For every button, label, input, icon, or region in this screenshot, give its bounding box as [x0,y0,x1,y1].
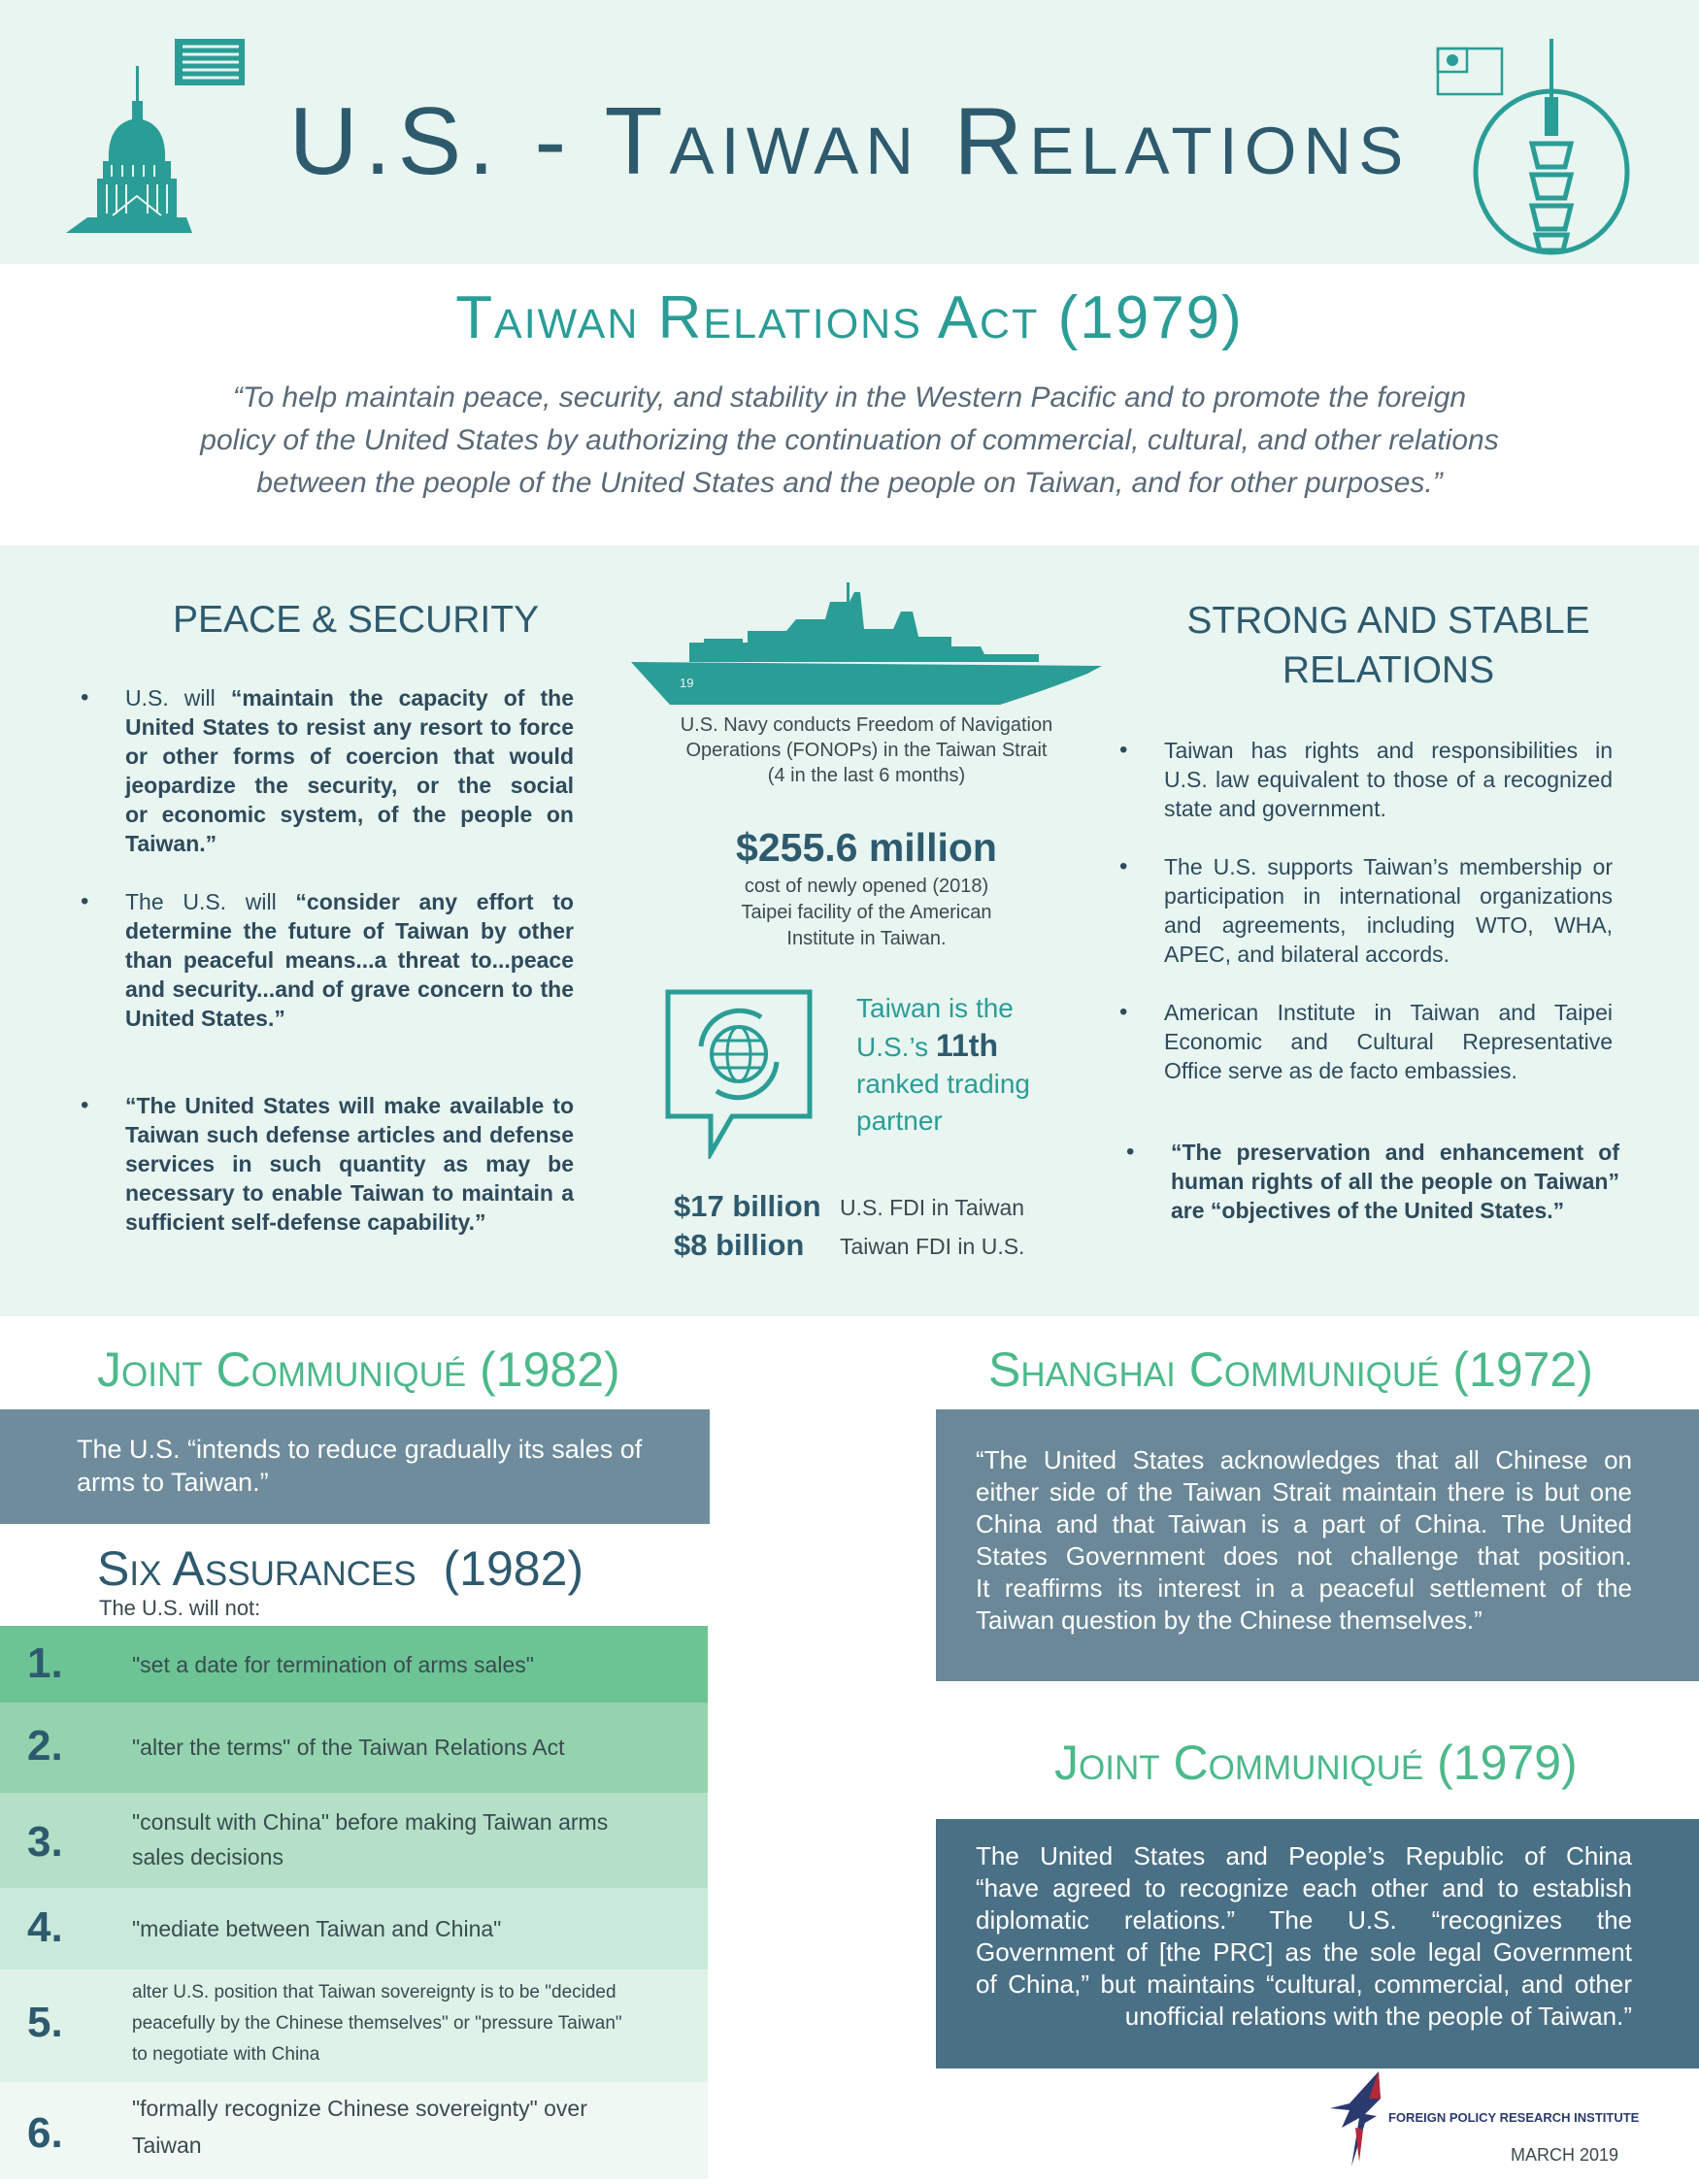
caption: AIT facility [742,876,991,949]
item 1 [0,1626,708,1703]
item 2: "alter the terms" of the Taiwan Relations Act [132,1735,564,1760]
item 1: 1. [27,1639,63,1687]
logo: FPRI: FOREIGN POLICY RESEARCH INSTITUTE [1388,2110,1639,2125]
icon: navy ship [631,582,1102,705]
bullet 2: and security...and of grave concern to the [125,976,574,1002]
item 2: 2. [27,1722,63,1770]
bullet r2: The U.S. supports Taiwan’s membership or [1164,854,1613,879]
bullet r3: Economic and Cultural Representative [1164,1029,1613,1054]
bullet r1 [1164,736,1613,823]
heading: Joint Communique 1982: Joint Communiqué (1982) [97,1342,620,1397]
box: 1979 communique: “have agreed to recognize each other and to establish [976,1873,1632,1903]
stat: FDI [674,1189,1024,1262]
item 2 [0,1703,708,1793]
bullet r3: Office serve as de facto embassies. [1164,1058,1517,1083]
caption: AIT facility: cost of newly opened (2018) [745,876,988,897]
caption: FONOPs: (4 in the last 6 months) [768,765,965,786]
text: 11th ranked trading partner: Taiwan is the U.S.’s 11th ranked trading partner [856,993,1030,1136]
text: the US will not: The U.S. will not: [99,1596,260,1620]
heading: Joint Communique 1979: Joint Communiqué (1979) [1054,1736,1578,1790]
item 6: 6. [27,2109,63,2157]
caption: FONOPs: Operations (FONOPs) in the Taiwan Strait [685,740,1047,761]
list: six assurances [0,1626,708,2179]
bullet r3 [1164,998,1613,1085]
item 5: 5. [27,1999,63,2046]
box: Shanghai communique: States Government does not challenge that position. [976,1541,1632,1571]
box: Shanghai communique: “The United States acknowledges that all Chinese on [976,1445,1632,1474]
bullet 2: United States.” [125,1006,285,1031]
bullet 3: sufficient self-defense capability.” [125,1209,486,1235]
item 3: sales decisions [132,1844,283,1870]
bullet 2: than peaceful means...a threat to...peace [125,947,574,973]
heading: strong and stable relations: STRONG AND STABLE RELATIONS [1186,600,1590,691]
box: Shanghai communique [936,1409,1699,1681]
bullet 1 [125,683,574,858]
bullet 1: Taiwan.” [125,831,217,856]
item 3: 3. [27,1818,63,1866]
quote: TRA purpose [200,381,1499,499]
bullet r2: APEC, and bilateral accords. [1164,942,1449,967]
item 6: Taiwan [132,2133,202,2158]
bullet r4: are “objectives of the United States.” [1171,1198,1564,1223]
bullet 3 [125,1091,574,1237]
item 6: "formally recognize Chinese sovereignty" over [132,2096,587,2121]
bullet r4: human rights of all the people on Taiwan” [1171,1169,1619,1194]
bullet r1: Taiwan has rights and responsibilities in [1164,738,1613,763]
item 5: peacefully by the Chinese themselves" or "pressure Taiwan" [132,2013,622,2034]
box: Shanghai communique: Taiwan question by the Chinese themselves.” [976,1605,1482,1635]
stat: $255.6 million: $255.6 million [736,825,997,870]
heading: Taiwan Relations Act: Taiwan Relations Act (1979) [455,284,1244,351]
stat: FDI: U.S. FDI in Taiwan [840,1195,1024,1220]
box: 1982 communique [0,1409,710,1524]
bullet 1: jeopardize the security, or the social [125,773,574,798]
logo: FPRI [1330,2071,1639,2167]
icon: globe speech bubble [666,990,812,1159]
item 3: "consult with China" before making Taiwan arms [132,1809,608,1835]
box: 1979 communique: unofficial relations with the people of Taiwan.” [1125,2002,1632,2031]
bullet r1: U.S. law equivalent to those of a recognized [1164,767,1613,792]
heading: six assurances: Six Assurances (1982) [97,1541,583,1596]
bullet 3: services in such quantity as may be [125,1151,574,1176]
item 4: "mediate between Taiwan and China" [132,1916,501,1941]
heading: Shanghai Communique: Shanghai Communiqué (1972) [988,1342,1593,1397]
caption: FONOPs [681,714,1052,786]
caption: AIT facility: Institute in Taiwan. [786,928,947,949]
bullet 2: determine the future of Taiwan by other [125,918,574,943]
logo: FPRI: MARCH 2019 [1511,2145,1618,2165]
bullet r1: state and government. [1164,796,1386,821]
bullet r2: participation in international organizations [1164,883,1613,909]
bullet r2: and agreements, including WTO, WHA, [1164,912,1613,938]
box: 1979 communique: Government of [the PRC] as the sole legal Government [976,1937,1632,1967]
item 4 [0,1888,708,1969]
bullet 1: U.S. will “maintain the capacity of the [125,685,574,711]
box: 1979 communique: diplomatic relations.” The U.S. “recognizes the [976,1905,1632,1935]
item 1: "set a date for termination of arms sales" [132,1652,534,1677]
box: Shanghai communique: It reaffirms its interest in a peaceful settlement of the [976,1573,1632,1603]
bullet 2: The U.S. will “consider any effort to [125,889,574,914]
icon: navy ship: 19 [680,676,693,690]
item 4: 4. [27,1903,63,1951]
title: U.S. - Taiwan Relations [289,87,1410,194]
quote: TRA purpose: between the people of the United States and the people on Taiwan, and for other purposes.” [256,467,1443,499]
bullet 3: Taiwan such defense articles and defense [125,1122,574,1147]
bullet r4: “The preservation and enhancement of [1171,1140,1619,1165]
bullet 1: or other forms of coercion that would [125,744,574,769]
bullet 3: necessary to enable Taiwan to maintain a [125,1180,574,1206]
bullet 3: “The United States will make available to [125,1093,574,1118]
header band [0,0,1699,264]
item 5 [0,1969,708,2082]
caption: FONOPs: U.S. Navy conducts Freedom of Navigation [681,714,1052,736]
bullet r3: American Institute in Taiwan and Taipei [1164,1000,1613,1025]
quote: TRA purpose: “To help maintain peace, security, and stability in the Western Pacific and to promote the foreign [233,381,1466,414]
bullet r4 [1171,1138,1619,1225]
bullet 1: or economic system, of the people on [125,802,574,827]
item 3 [0,1793,708,1888]
caption: AIT facility: Taipei facility of the American [742,902,991,923]
item 5: alter U.S. position that Taiwan sovereignty is to be "decided [132,1982,616,2002]
bullet r2 [1164,852,1613,969]
box: 1979 communique [936,1819,1699,2068]
icon: US capitol [66,39,245,233]
stat: FDI: $8 billion [674,1228,804,1262]
box: 1979 communique: of China,” but maintains “cultural, commercial, and other [976,1969,1632,1999]
bullet 1: United States to resist any resort to force [125,714,574,740]
box: Shanghai communique: China and that Taiwan is a part of China. The United [976,1509,1632,1539]
panel: TRA details band [0,546,1699,1316]
box: Shanghai communique: either side of the Taiwan Strait maintain there is but one [976,1477,1632,1506]
stat: FDI: Taiwan FDI in U.S. [840,1234,1024,1259]
box: 1982 communique: The U.S. “intends to reduce gradually its sales of arms to Taiwan.” [77,1435,642,1497]
box: 1979 communique: The United States and People’s Republic of China [976,1841,1632,1870]
item 6 [0,2082,708,2179]
quote: TRA purpose: policy of the United States by authorizing the continuation of commercial, cultural, and other relations [200,424,1499,456]
icon: Taiwan flag and Taipei 101 [1437,39,1629,254]
item 5: to negotiate with China [132,2044,319,2065]
bullet 2 [125,887,574,1033]
stat: FDI: $17 billion [674,1189,821,1223]
heading: peace & security: PEACE & SECURITY [173,599,539,641]
